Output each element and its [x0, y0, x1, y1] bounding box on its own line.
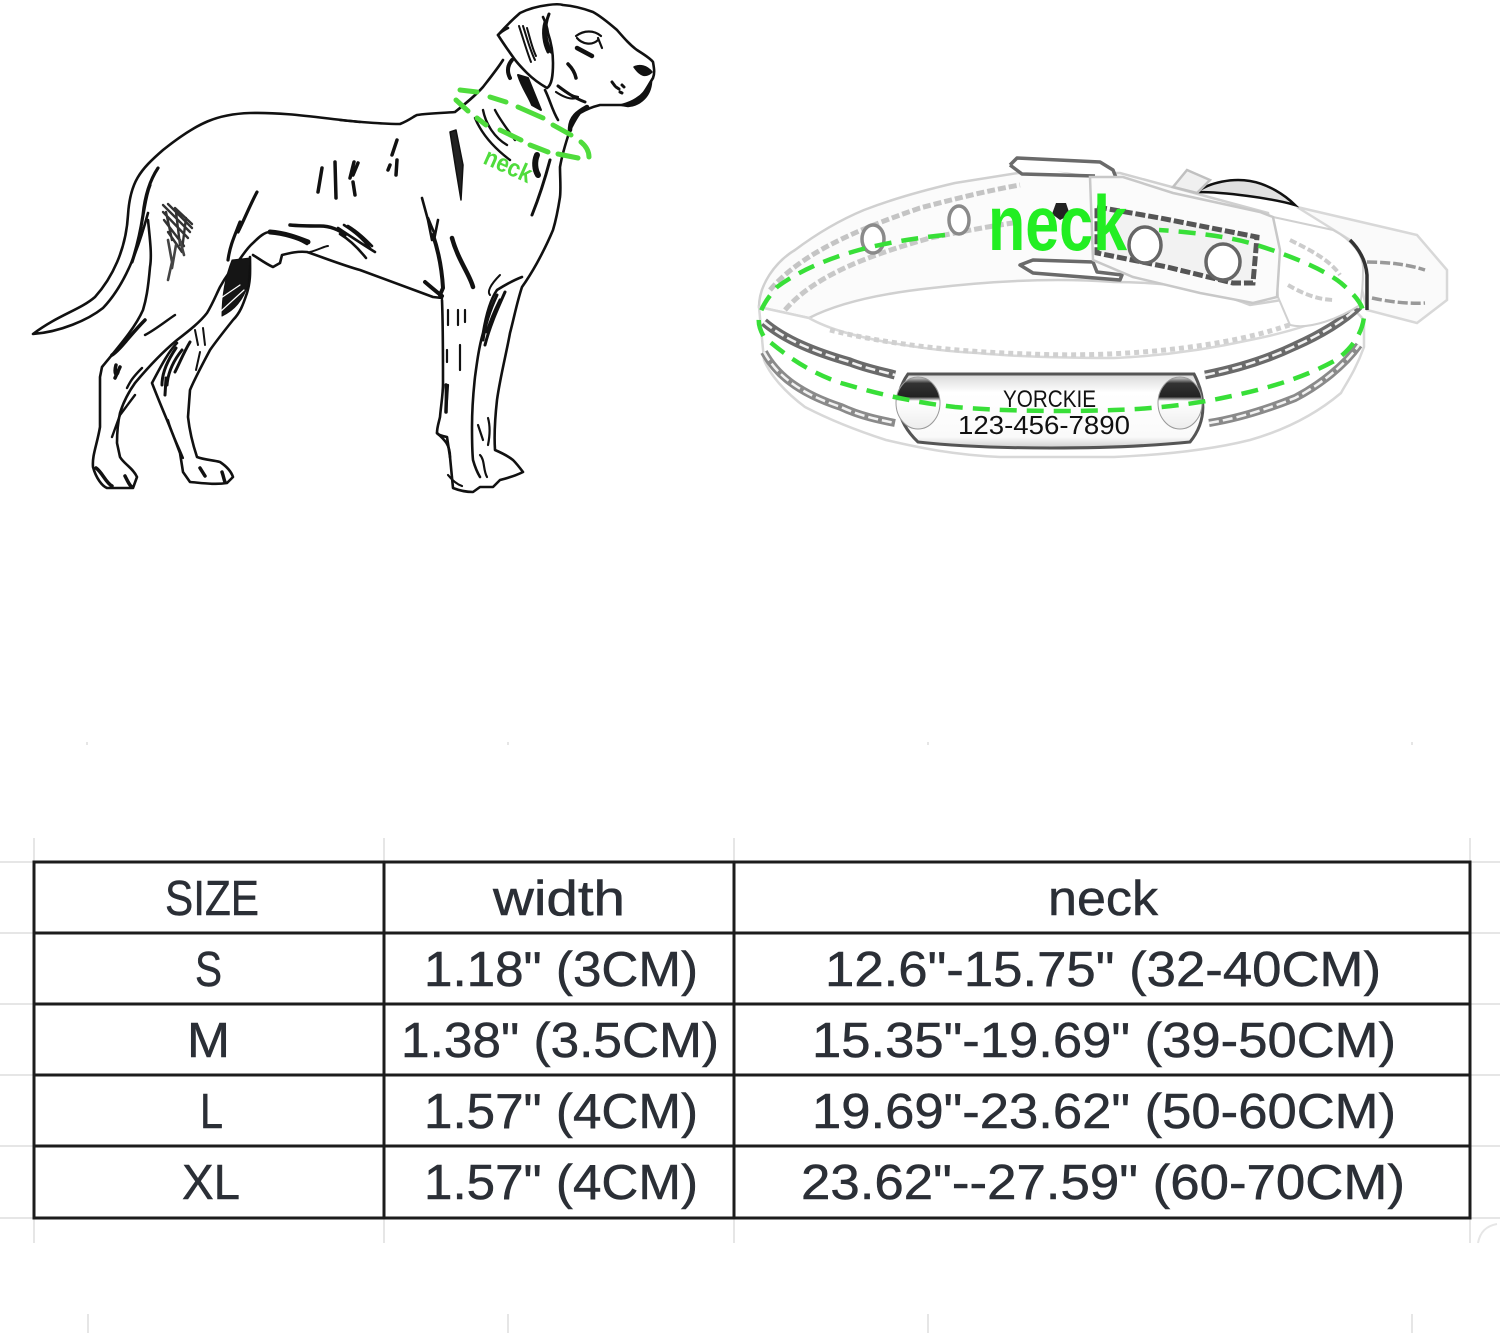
row L: 19.69"-23.62" (50-60CM): [812, 1085, 1396, 1139]
table text: [165, 872, 1405, 1210]
header row: SIZE: [165, 872, 259, 926]
row XL: [182, 1156, 1405, 1210]
row XL: XL: [182, 1156, 240, 1210]
row S: [195, 943, 1381, 997]
header row: neck: [1048, 872, 1159, 926]
header row: [165, 872, 1159, 926]
row L: 1.57" (4CM): [424, 1085, 698, 1139]
row M: 15.35"-19.69" (39-50CM): [812, 1014, 1396, 1068]
collar curved strap: [1273, 217, 1363, 326]
row S: S: [195, 943, 222, 997]
collar strap: [1090, 177, 1280, 303]
collar front band: [759, 305, 1364, 457]
illustration: collar: [759, 158, 1447, 457]
illustration: dog side view: [33, 4, 654, 492]
row XL: 1.57" (4CM): [424, 1156, 698, 1210]
collar strap tip: [1297, 207, 1447, 323]
dog ear: [498, 17, 553, 88]
row M: [187, 1014, 1396, 1068]
row S: 12.6"-15.75" (32-40CM): [825, 943, 1381, 997]
dog body outline: [33, 4, 654, 492]
plate phone: 123-456-7890: [958, 410, 1130, 440]
neck label on dog: neck: [480, 143, 537, 189]
neck measure: dog: [456, 90, 589, 189]
collar stitching: [764, 185, 1359, 423]
header row: width: [492, 872, 625, 926]
collar eyelets: [862, 206, 969, 253]
size table: [34, 862, 1470, 1218]
neck measure: collar: [759, 230, 1364, 411]
row L: L: [200, 1085, 223, 1139]
plate name: YORCKIE: [1003, 386, 1096, 413]
row M: M: [187, 1014, 230, 1068]
row XL: 23.62"--27.59" (60-70CM): [801, 1156, 1405, 1210]
row M: 1.38" (3.5CM): [401, 1014, 719, 1068]
dog shading and hatching: [96, 110, 550, 487]
collar ring: [1197, 180, 1295, 205]
table grid: [34, 862, 1470, 1218]
collar name plate: [896, 374, 1203, 448]
row L: [200, 1085, 1396, 1139]
collar buckle: [1010, 158, 1122, 280]
collar back band: [759, 173, 1282, 318]
faint background spreadsheet marks: [0, 742, 1500, 1333]
plate rivets: [896, 377, 940, 429]
neck label on collar: neck: [988, 179, 1127, 267]
dog face details: [508, 14, 652, 130]
row S: 1.18" (3CM): [424, 943, 698, 997]
collar holes: [1129, 227, 1240, 280]
